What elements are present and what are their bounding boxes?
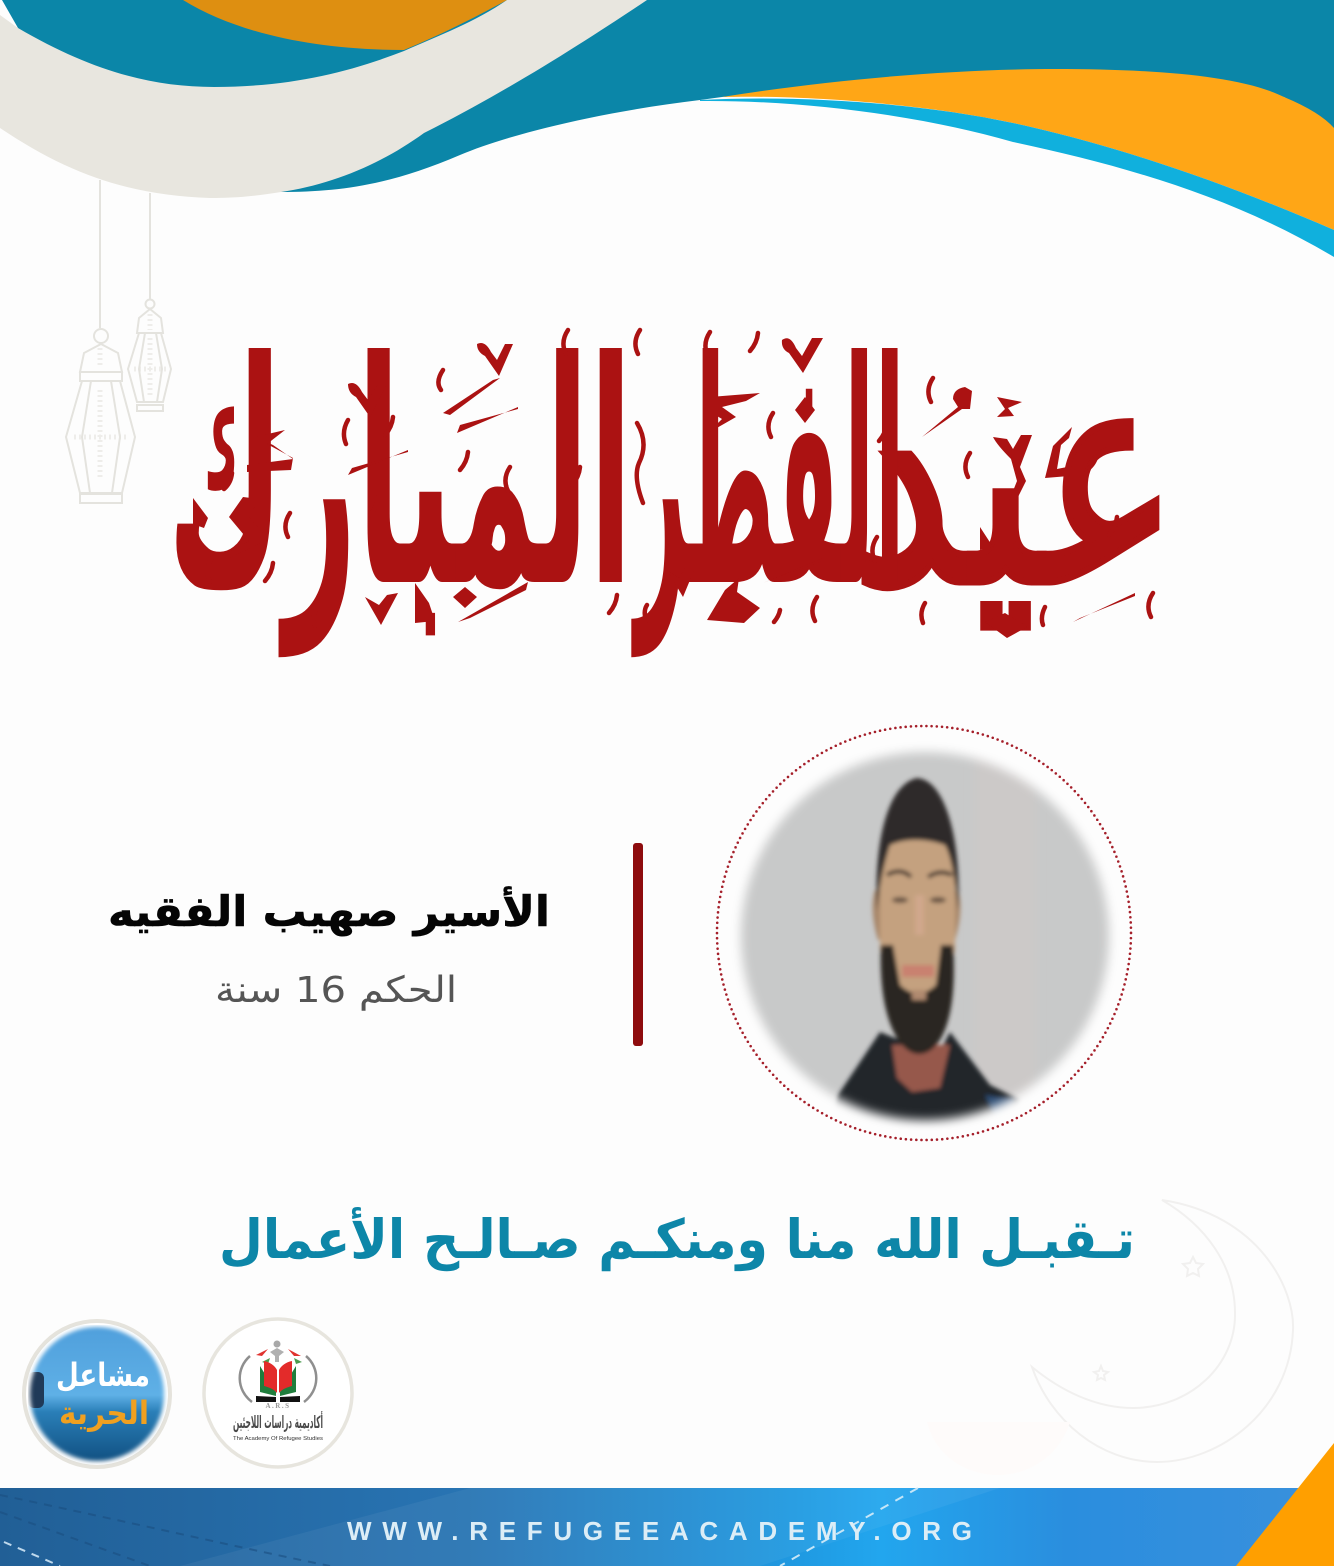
top wave: orange right: [722, 69, 1334, 230]
calligraphy title: الفطر: [631, 297, 905, 658]
greeting line: تـقبـل الله منا ومنكـم صـالـح الأعمال: [219, 1207, 1135, 1271]
logo: freedom torches: مشاعل: [56, 1356, 150, 1394]
ears: [873, 890, 960, 940]
arc accents and figure: [256, 1340, 302, 1364]
crescent moon decoration: [1032, 1200, 1293, 1462]
letters ARS: A.R.S: [265, 1402, 291, 1410]
logo: freedom torches: [24, 1321, 170, 1467]
neck and jacket: [828, 1032, 1020, 1130]
orange corner: [1236, 1443, 1334, 1566]
calligraphy ornaments: vees and marks: [193, 338, 1072, 638]
eyes and nose: [887, 871, 952, 877]
divider bar: [633, 843, 643, 1046]
calligraphy title: عيد: [850, 297, 1180, 655]
photo ring: [717, 726, 1131, 1140]
wreath: [240, 1356, 316, 1402]
academy english name: The Academy Of Refugee Studies: [233, 1436, 324, 1442]
logo: freedom torches: الحرية: [59, 1394, 149, 1432]
logo: academy of refugee studies: [204, 1319, 352, 1467]
prisoner name: الأسير صهيب الفقيه: [108, 886, 550, 937]
calligraphy ornaments: long strokes: [348, 378, 1135, 622]
face: [876, 836, 958, 956]
calligraphy ornaments: ticks: [207, 330, 1153, 626]
book: [256, 1361, 300, 1402]
calligraphy title: [168, 297, 1180, 658]
hair: [877, 778, 959, 910]
top wave: dark orange: [183, 0, 507, 50]
logo: academy of refugee studies: أكاديمية دراسات اللاجئين: [233, 1411, 323, 1433]
calligraphy title: المبارك: [168, 297, 632, 658]
top wave: cyan strip: [700, 99, 1334, 257]
sentence text: الحكم 16 سنة: [215, 970, 457, 1011]
footer bar: [0, 1488, 1334, 1566]
faint pink half circle: [927, 1422, 1070, 1475]
top wave: beige band: [0, 0, 647, 198]
beard: [881, 945, 954, 1054]
top wave: teal band: [2, 0, 1334, 192]
portrait photo: [730, 740, 1120, 1130]
website address: WWW.REFUGEEACADEMY.ORG: [347, 1516, 972, 1546]
lanterns decoration: [66, 180, 171, 503]
